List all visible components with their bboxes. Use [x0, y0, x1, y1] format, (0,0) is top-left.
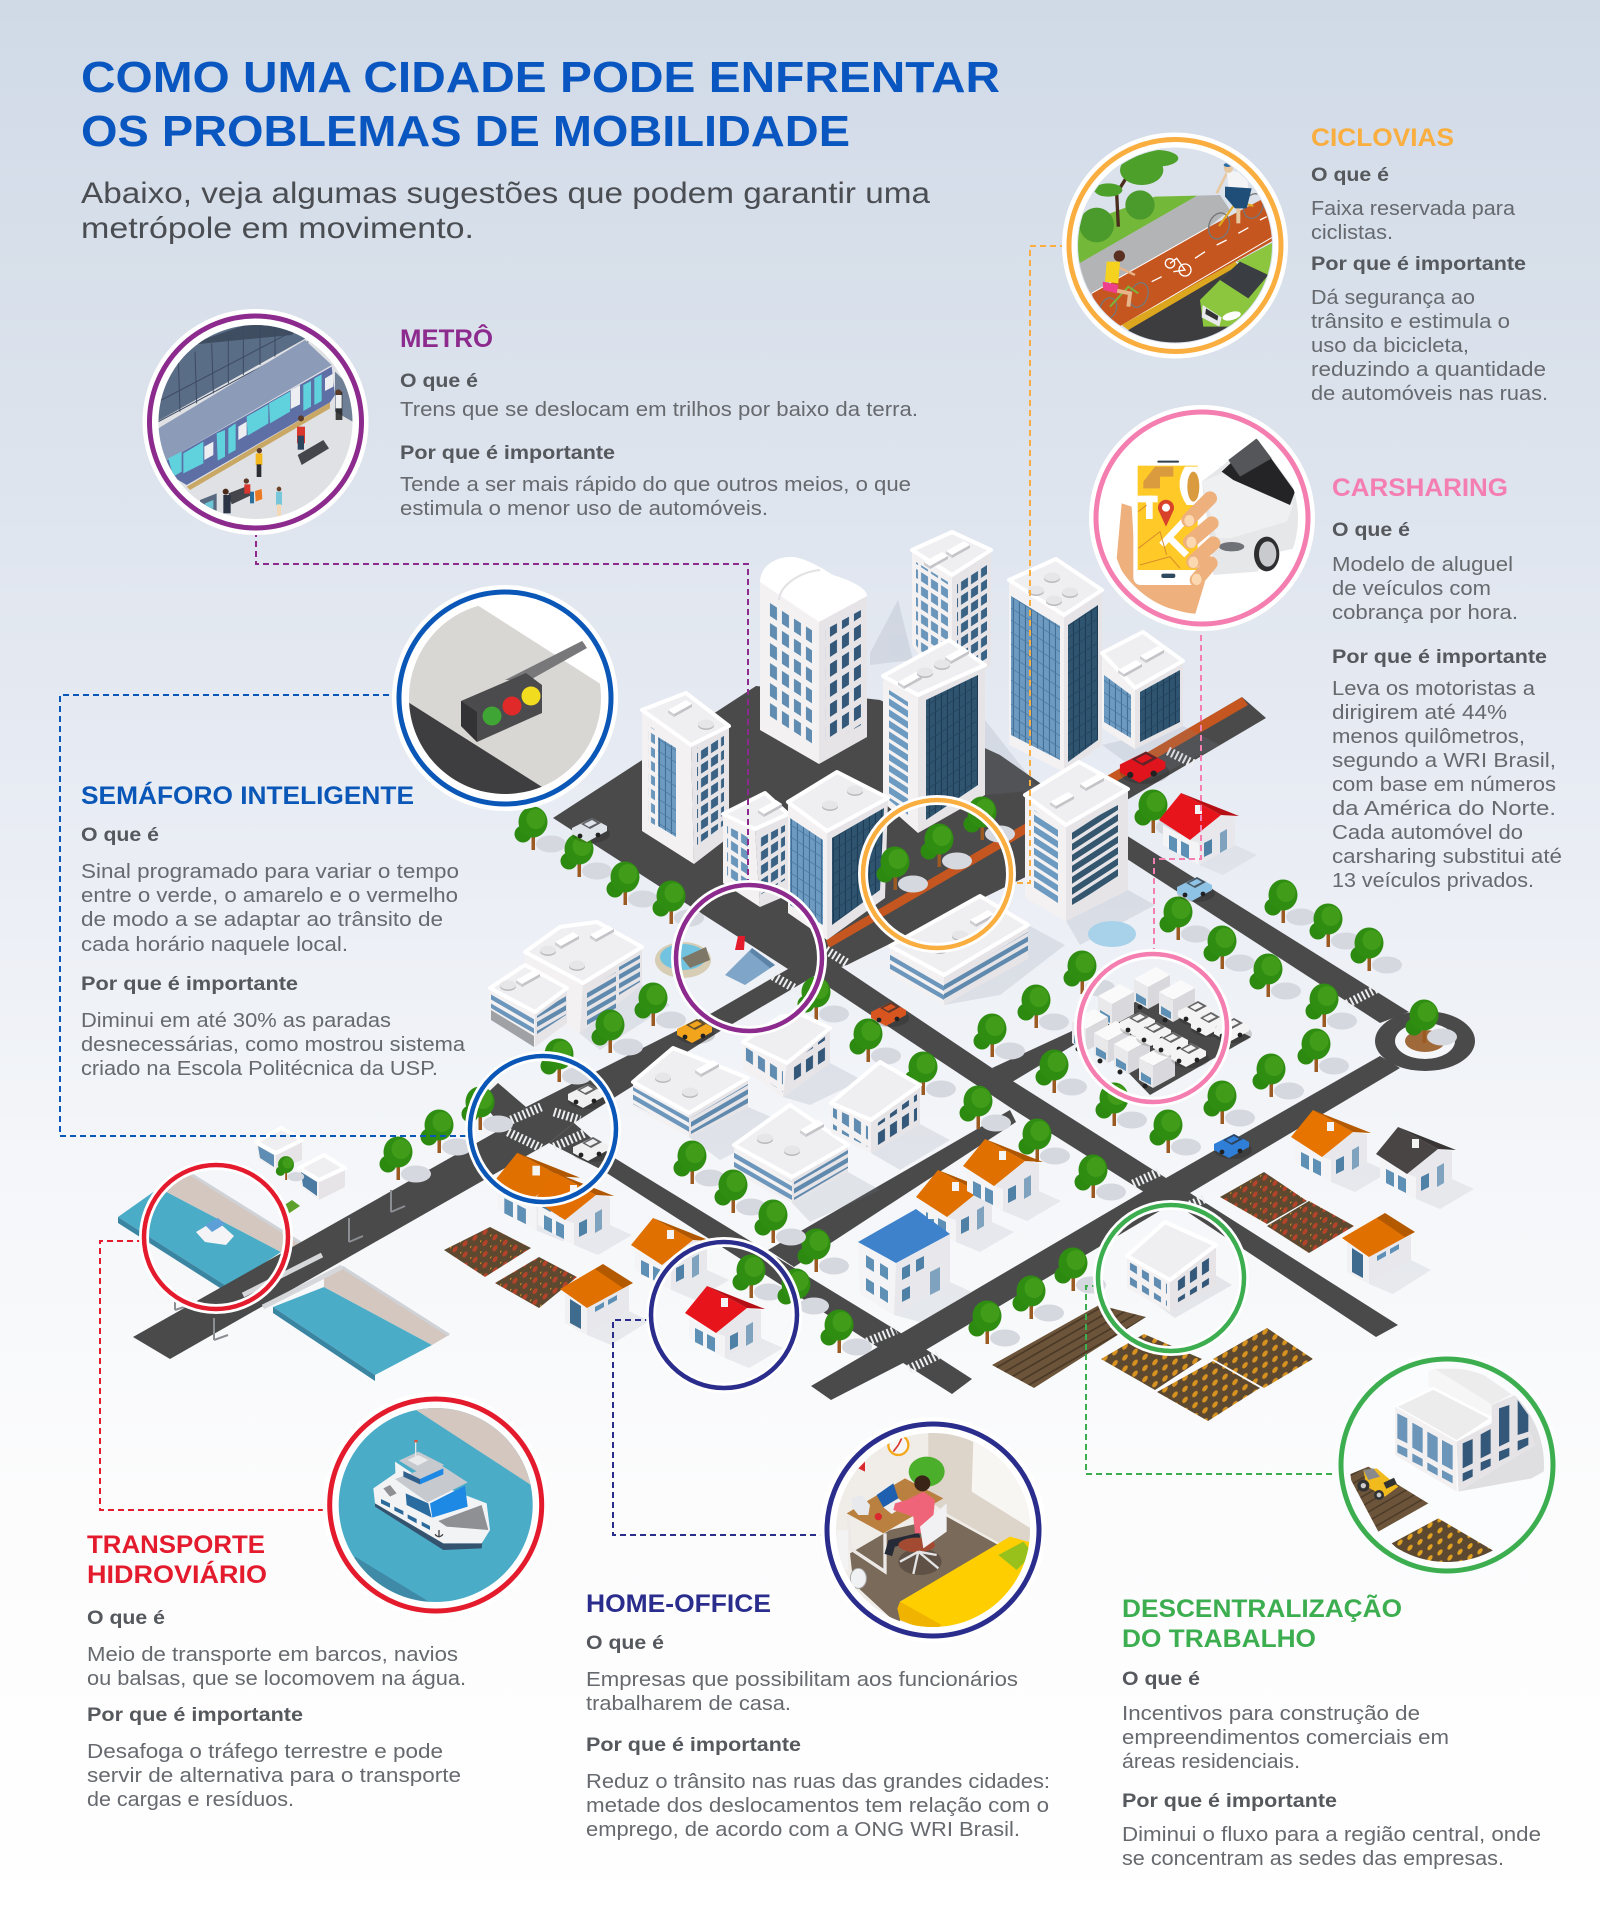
why it matters: com base em números	[1332, 774, 1556, 796]
bike lane	[826, 697, 1248, 948]
why it matters: emprego, de acordo com a ONG WRI Brasil.	[586, 1819, 1020, 1841]
house: blue roof two-storey	[858, 1209, 972, 1322]
tower: centre	[883, 640, 985, 833]
why it matters	[586, 1734, 1050, 1841]
why it matters: Por que é importante	[1311, 253, 1526, 275]
heading	[87, 1531, 267, 1589]
why it matters	[1332, 646, 1562, 892]
tower: top centre	[912, 532, 991, 700]
building shadows	[567, 600, 1220, 1222]
heading: HOME-OFFICE	[586, 1590, 771, 1618]
why it matters	[81, 973, 466, 1080]
panel: descentralizacao do trabalho	[1122, 1593, 1541, 1870]
panel: ciclovias	[1311, 124, 1548, 405]
icon: metro circle	[142, 309, 368, 535]
why it matters: criado na Escola Politécnica da USP.	[81, 1058, 438, 1080]
heading: CARSHARING	[1332, 474, 1508, 502]
what it is	[81, 824, 459, 956]
icon: decentralization circle	[1334, 1352, 1560, 1578]
why it matters: Leva os motoristas a	[1332, 678, 1536, 700]
what it is	[1122, 1668, 1449, 1773]
crop fields	[444, 1172, 1354, 1421]
what it is	[1332, 519, 1518, 624]
why it matters: servir de alternativa para o transporte	[87, 1765, 461, 1787]
panel: home-office	[586, 1590, 1050, 1841]
why it matters: Desafoga o tráfego terrestre e pode	[87, 1741, 443, 1763]
why it matters: Por que é importante	[1332, 646, 1547, 668]
why it matters: trânsito e estimula o	[1311, 311, 1510, 333]
heading: HIDROVIÁRIO	[87, 1560, 267, 1589]
icon: bike lane circle	[1062, 132, 1288, 358]
what it is: cobrança por hora.	[1332, 602, 1518, 624]
why it matters: uso da bicicleta,	[1311, 335, 1469, 357]
bridge railings	[243, 1255, 342, 1307]
why it matters: de cargas e resíduos.	[87, 1789, 294, 1811]
what it is: O que é	[87, 1607, 165, 1629]
what it is: Incentivos para construção de	[1122, 1703, 1420, 1725]
what it is	[87, 1607, 466, 1690]
what it is: trabalharem de casa.	[586, 1693, 791, 1715]
icon: traffic light circle	[392, 585, 618, 811]
heading: SEMÁFORO INTELIGENTE	[81, 781, 414, 810]
why it matters: da América do Norte.	[1332, 798, 1556, 820]
tower: front glass	[788, 772, 888, 940]
what it is: áreas residenciais.	[1122, 1751, 1300, 1773]
why it matters: Diminui em até 30% as paradas	[81, 1010, 391, 1032]
why it matters: Por que é importante	[400, 442, 615, 464]
icon: carsharing circle	[1089, 405, 1315, 631]
why it matters: de automóveis nas ruas.	[1311, 383, 1548, 405]
what it is: Sinal programado para variar o tempo	[81, 861, 459, 883]
city map	[118, 532, 1475, 1421]
why it matters	[1122, 1790, 1541, 1870]
why it matters: menos quilômetros,	[1332, 726, 1525, 748]
what it is: Trens que se deslocam em trilhos por baixo da terra.	[400, 399, 918, 421]
why it matters: Diminui o fluxo para a região central, onde	[1122, 1824, 1541, 1846]
tower: louvered right	[1025, 762, 1128, 921]
tower: blue glass	[1009, 559, 1102, 772]
river	[118, 1173, 449, 1381]
what it is: O que é	[1332, 519, 1410, 541]
what it is: Modelo de aluguel	[1332, 554, 1513, 576]
title: COMO UMA CIDADE PODE ENFRENTAR	[81, 53, 1000, 102]
why it matters	[1311, 253, 1548, 405]
heading: DO TRABALHO	[1122, 1625, 1316, 1653]
panel: carsharing	[1332, 474, 1562, 892]
why it matters: dirigirem até 44%	[1332, 702, 1507, 724]
subtitle: Abaixo, veja algumas sugestões que podem garantir uma	[81, 177, 930, 210]
why it matters: Por que é importante	[586, 1734, 801, 1756]
why it matters: Tende a ser mais rápido do que outros meios, o que	[400, 474, 911, 496]
connector lines	[60, 246, 1340, 1535]
why it matters: metade dos deslocamentos tem relação com o	[586, 1795, 1049, 1817]
houses	[494, 793, 1474, 1368]
why it matters: Por que é importante	[1122, 1790, 1337, 1812]
building: small front	[723, 793, 788, 907]
street lights	[175, 1190, 405, 1340]
why it matters: desnecessárias, como mostrou sistema	[81, 1034, 466, 1056]
why it matters: Por que é importante	[87, 1704, 303, 1726]
heading: TRANSPORTE	[87, 1531, 265, 1559]
office cluster	[490, 922, 642, 1047]
building: wide low	[890, 896, 1028, 1005]
what it is: O que é	[1122, 1668, 1200, 1690]
pool	[1088, 921, 1136, 947]
title	[81, 53, 1000, 156]
why it matters: Cada automóvel do	[1332, 822, 1523, 844]
why it matters	[87, 1704, 461, 1811]
vehicles	[568, 751, 1252, 1162]
what it is: ou balsas, que se locomovem na água.	[87, 1668, 466, 1690]
map boat	[196, 1218, 234, 1245]
why it matters: se concentram as sedes das empresas.	[1122, 1848, 1504, 1870]
tower: left	[642, 693, 729, 864]
why it matters: Reduz o trânsito nas ruas das grandes cidades:	[586, 1771, 1050, 1793]
what it is: O que é	[400, 370, 478, 392]
panel: metro	[400, 323, 918, 520]
why it matters: segundo a WRI Brasil,	[1332, 750, 1556, 772]
what it is: cada horário naquele local.	[81, 934, 348, 956]
why it matters	[400, 442, 911, 520]
what it is: de modo a se adaptar ao trânsito de	[81, 909, 443, 931]
trees: back row	[514, 796, 1015, 1098]
why it matters: estimula o menor uso de automóveis.	[400, 498, 768, 520]
why it matters: carsharing substitui até	[1332, 846, 1562, 868]
crosswalks	[508, 751, 1376, 1369]
heading	[1122, 1593, 1402, 1653]
map focus rings	[144, 800, 1244, 1388]
what it is: Empresas que possibilitam aos funcionários	[586, 1669, 1018, 1691]
title: OS PROBLEMAS DE MOBILIDADE	[81, 107, 850, 156]
why it matters: Por que é importante	[81, 973, 298, 995]
tower: arched roof	[760, 557, 867, 764]
icon: home office circle	[820, 1417, 1046, 1645]
what it is	[586, 1632, 1018, 1715]
why it matters: 13 veículos privados.	[1332, 870, 1534, 892]
panel: transporte hidroviario	[87, 1531, 466, 1811]
what it is: entre o verde, o amarelo e o vermelho	[81, 885, 458, 907]
what it is	[1311, 164, 1516, 244]
icon: ship circle	[323, 1392, 552, 1622]
small buildings near the river	[256, 1128, 345, 1214]
why it matters: reduzindo a quantidade	[1311, 359, 1546, 381]
what it is: Meio de transporte em barcos, navios	[87, 1644, 458, 1666]
roundabout island	[1395, 1023, 1455, 1059]
what it is: O que é	[586, 1632, 664, 1654]
heading: DESCENTRALIZAÇÃO	[1122, 1593, 1402, 1623]
subtitle: metrópole em movimento.	[81, 212, 474, 245]
parking lot vehicles	[1072, 967, 1252, 1088]
metro station	[725, 936, 775, 985]
what it is: O que é	[1311, 164, 1389, 186]
subtitle	[81, 177, 930, 245]
roads	[133, 686, 1475, 1400]
what it is: Faixa reservada para	[1311, 198, 1516, 220]
panel: semaforo inteligente	[81, 781, 466, 1080]
what it is: empreendimentos comerciais em	[1122, 1727, 1449, 1749]
tower: small right	[1102, 632, 1183, 749]
what it is: ciclistas.	[1311, 222, 1393, 244]
what it is: O que é	[81, 824, 159, 846]
heading: CICLOVIAS	[1311, 124, 1454, 152]
what it is: de veículos com	[1332, 578, 1491, 600]
why it matters: Dá segurança ao	[1311, 287, 1475, 309]
decentralization building on map	[1127, 1222, 1232, 1318]
fountain	[655, 942, 711, 978]
trees: front rows	[380, 790, 1457, 1356]
offices: middle blocks	[633, 1014, 920, 1203]
heading: METRÔ	[400, 323, 493, 353]
what it is	[400, 370, 918, 421]
